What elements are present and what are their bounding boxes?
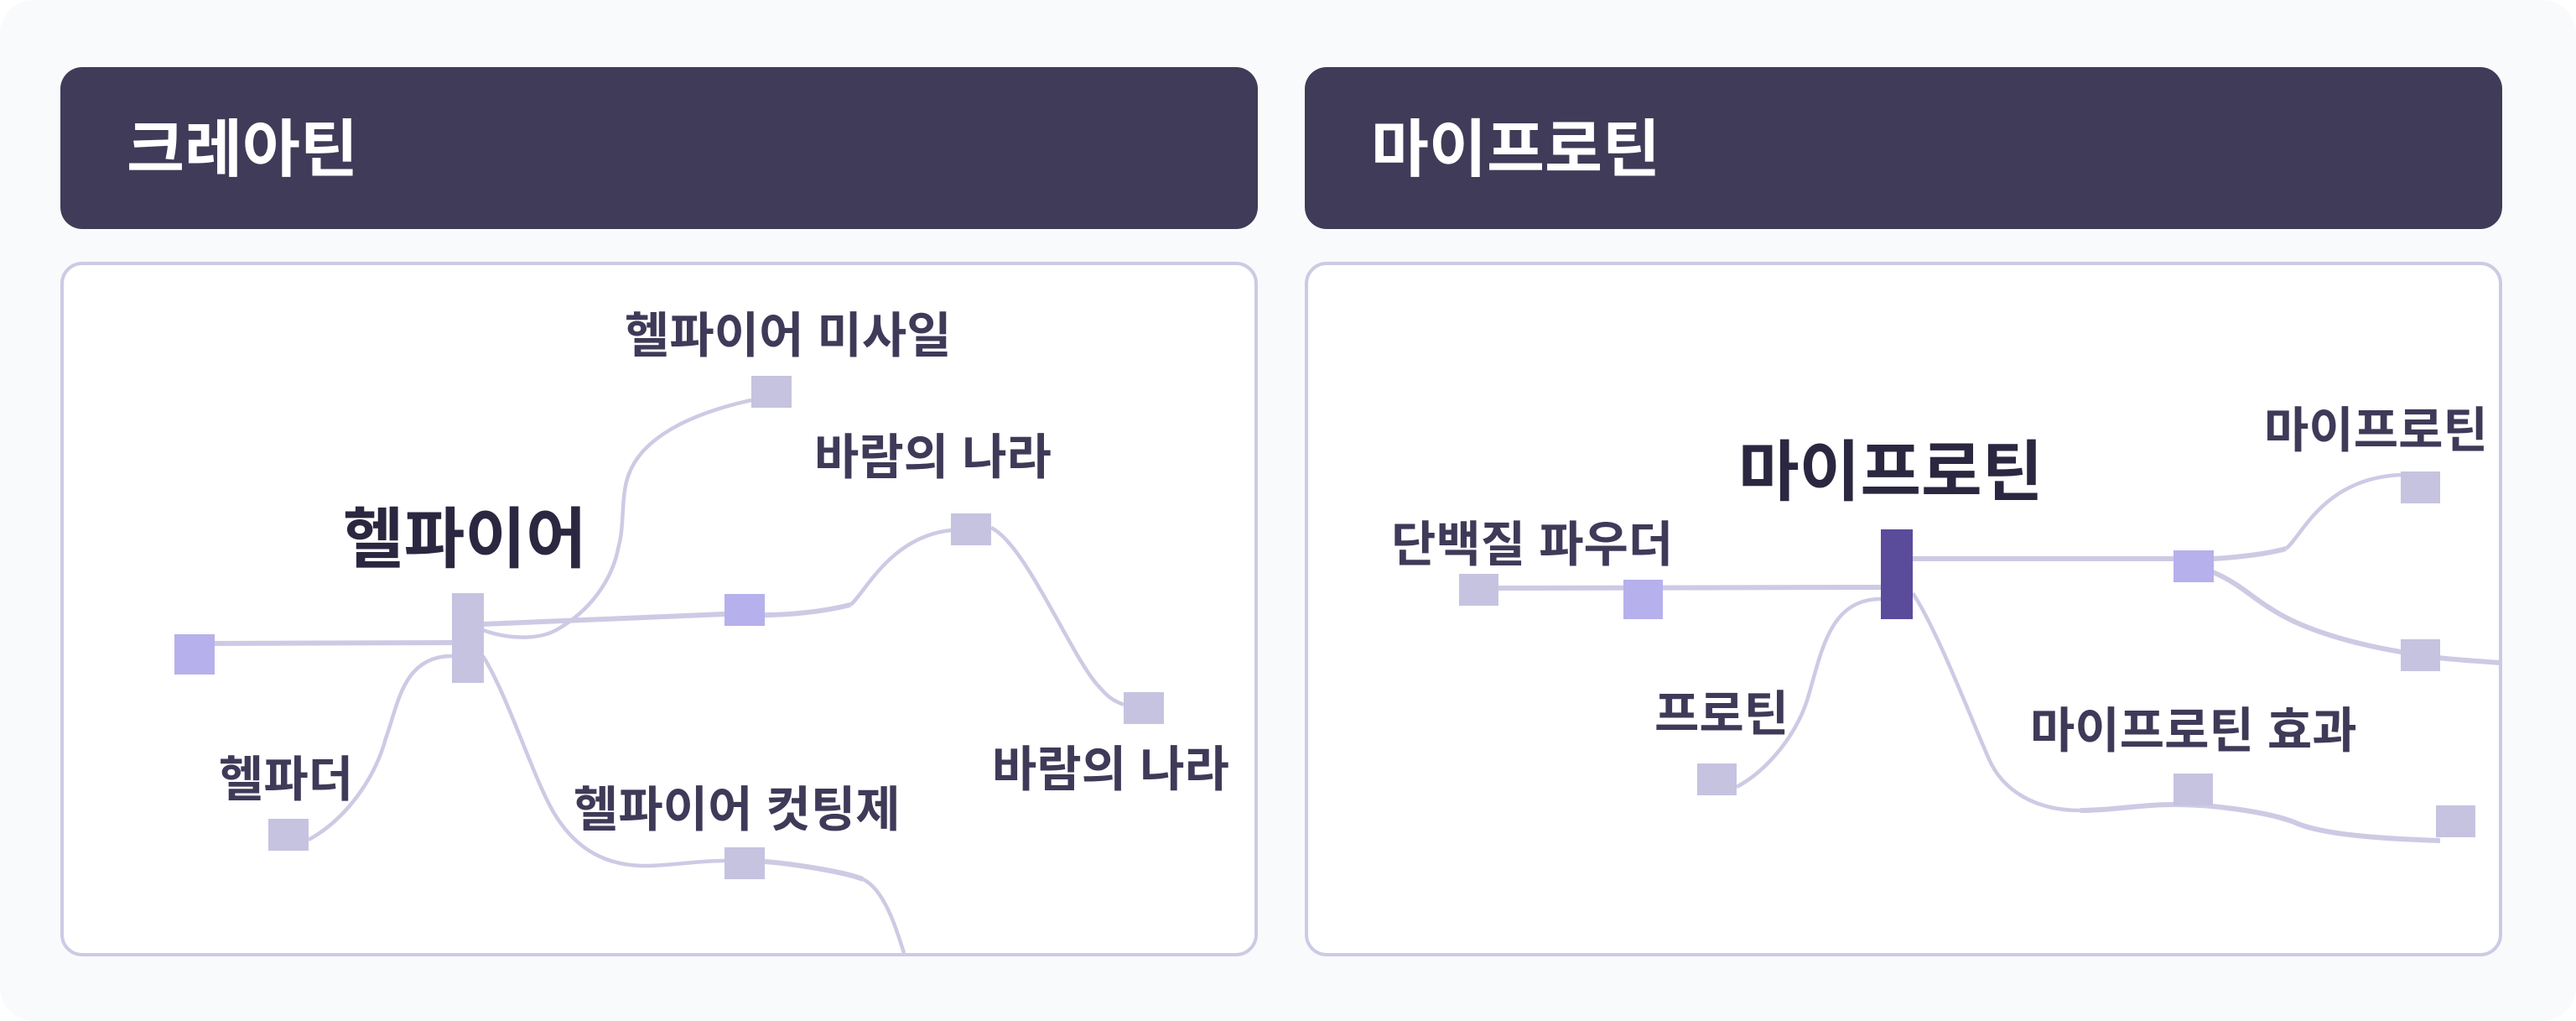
node: left purple <box>1623 580 1663 619</box>
panel: myprotein keyword map <box>1306 263 2501 955</box>
header: creatine <box>60 67 1258 229</box>
label: protein: 프로틴 <box>1654 687 1789 742</box>
label: central helper: 헬파이어 <box>343 502 587 576</box>
label: helpader: 헬파더 <box>219 753 353 807</box>
node: protein powder <box>1459 574 1498 606</box>
label: land of wind top: 바람의 나라 <box>814 430 1052 485</box>
label: central myprotein: 마이프로틴 <box>1738 435 2043 509</box>
node: right purple <box>2174 550 2214 582</box>
header: creatine: 크레아틴 <box>127 114 358 185</box>
label: land of wind lower: 바람의 나라 <box>992 742 1229 797</box>
panel: creatine keyword map <box>62 263 1256 955</box>
node: myprotein effect <box>2174 774 2213 805</box>
node: land of wind top <box>951 513 991 545</box>
node: helpader <box>268 819 309 851</box>
label: myprotein top: 마이프로틴 <box>2264 404 2488 458</box>
label: cutting agent: 헬파이어 컷팅제 <box>574 783 901 837</box>
label: myprotein effect: 마이프로틴 효과 <box>2030 704 2357 758</box>
node: helper missile <box>751 376 792 408</box>
connector lines: myprotein <box>1498 475 2501 841</box>
node: right middle <box>2401 639 2440 671</box>
node: myprotein top <box>2401 471 2440 503</box>
node: bottom right <box>2436 805 2475 837</box>
node: central myprotein <box>1881 529 1913 619</box>
node: cutting agent <box>724 847 765 879</box>
node: left source <box>174 634 215 675</box>
label: protein powder: 단백질 파우더 <box>1391 518 1673 572</box>
header: myprotein <box>1305 67 2502 229</box>
node: central creatine <box>452 593 484 683</box>
node: land of wind lower <box>1124 692 1164 724</box>
node: protein <box>1697 763 1737 795</box>
node: middle purple <box>724 594 765 626</box>
connector lines: creatine <box>214 400 1124 953</box>
label: helper missile: 헬파이어 미사일 <box>625 309 952 363</box>
header: myprotein: 마이프로틴 <box>1371 114 1660 185</box>
